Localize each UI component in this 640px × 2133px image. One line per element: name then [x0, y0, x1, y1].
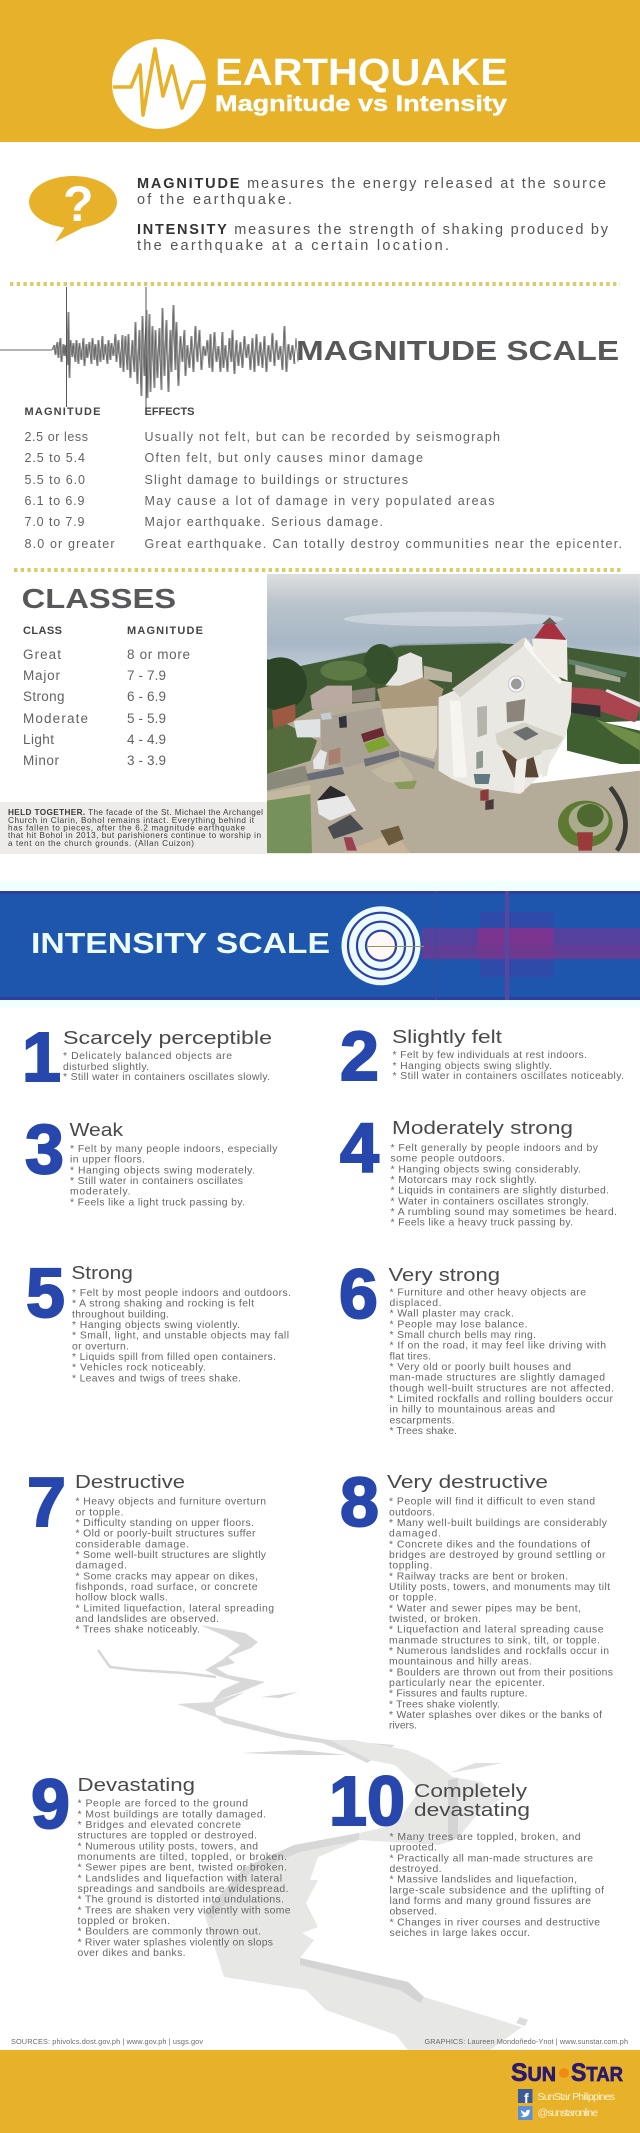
effects: considerable damage. — [76, 1539, 189, 1550]
effects: * Hanging objects swing violently. — [72, 1320, 240, 1331]
effects: * Trees are shaken very violently with some — [78, 1905, 291, 1916]
effects — [72, 1288, 291, 1384]
effects: * Practically all man-made structures are — [390, 1853, 593, 1864]
effects: * A strong shaking and rocking is felt — [72, 1299, 254, 1310]
effects: * Concrete dikes and the foundations of — [389, 1539, 590, 1550]
effects: flat tires. — [390, 1351, 431, 1362]
effects: monuments are tilted, toppled, or broken. — [78, 1852, 287, 1863]
number 5: 5 — [26, 1254, 65, 1332]
panel: definitions — [29, 176, 609, 254]
title — [414, 1781, 530, 1820]
table: classes and magnitude: Strong — [23, 689, 64, 704]
logo: SunStar — [511, 2059, 624, 2087]
item: intensity 5 — [26, 1254, 291, 1384]
panel: classes — [0, 574, 640, 854]
table: magnitude and effects — [24, 406, 622, 551]
effects: structures are toppled or destroyed. — [78, 1831, 257, 1842]
title: Devastating — [78, 1775, 195, 1795]
effects: * River water splashes violently on slops — [78, 1937, 273, 1948]
effects: or topple. — [389, 1593, 437, 1604]
effects: Utility posts, towers, and monuments may tilt — [389, 1582, 610, 1593]
effects: particularly near the epicenter. — [389, 1678, 545, 1689]
title: Scarcely perceptible — [63, 1028, 272, 1048]
table: magnitude and effects: 8.0 or greater — [24, 537, 114, 551]
table: magnitude and effects: Great earthquake. Can totally destroy communities near the epicenter. — [144, 537, 622, 551]
effects: * Liquefaction and lateral spreading cause — [389, 1625, 604, 1636]
caption: that hit Bohol in 2013, but parishioners continue to worship in — [8, 831, 261, 840]
title: Destructive — [75, 1472, 185, 1492]
effects: fishponds, road surface, or concrete — [76, 1582, 258, 1593]
effects: * Small, light, and unstable objects may fall — [72, 1331, 289, 1342]
effects: manmade structures to sink, tilt, or topple. — [389, 1635, 600, 1646]
effects: * Liquids spill from filled open containers. — [72, 1352, 276, 1363]
effects: * Boulders are thrown out from their positions — [389, 1667, 613, 1678]
effects: * Changes in river courses and destructive — [390, 1917, 600, 1928]
effects: * Difficulty standing on upper floors. — [76, 1518, 254, 1529]
logo: SunStar: SUN — [511, 2059, 556, 2087]
effects: displaced. — [390, 1298, 442, 1309]
effects: * Water in containers oscillates strongly. — [390, 1196, 589, 1207]
effects: * Trees shake violently. — [389, 1699, 500, 1710]
effects: over dikes and banks. — [78, 1948, 186, 1959]
effects: disturbed slightly. — [63, 1062, 149, 1073]
caption: HELD TOGETHER. The facade of the St. Michael the Archangel — [8, 808, 263, 817]
heading: classes: CLASSES — [22, 583, 176, 614]
title: Very destructive — [387, 1472, 548, 1492]
number 8: 8 — [340, 1463, 379, 1541]
title: Strong — [71, 1263, 133, 1283]
effects: * Still water in containers oscillates — [70, 1176, 243, 1187]
effects: hollow block walls. — [76, 1593, 168, 1604]
caption: has fallen to pieces, after the 6.2 magnitude earthquake — [8, 824, 245, 832]
effects — [390, 1832, 604, 1939]
table: classes and magnitude — [23, 625, 203, 768]
effects: * People will find it difficult to even stand — [389, 1497, 595, 1508]
panel: intensity scale banner — [0, 881, 640, 1007]
effects: destroyed. — [390, 1864, 442, 1875]
effects: twisted, or broken. — [389, 1614, 481, 1625]
item: intensity 8 — [340, 1463, 613, 1732]
effects: damaged. — [76, 1561, 127, 1572]
item: intensity 1 — [22, 1018, 272, 1096]
title: devastating — [414, 1800, 530, 1820]
effects: * Felt by most people indoors and outdoors. — [72, 1288, 291, 1299]
panel: footer — [0, 2050, 640, 2133]
item: intensity 9 — [31, 1765, 291, 1959]
photo: damaged church aerial — [254, 574, 640, 853]
chart: banner seismic wave — [422, 891, 640, 1000]
effects: or overturn. — [72, 1341, 129, 1352]
effects: * Bridges and elevated concrete — [78, 1820, 241, 1831]
effects: * Delicately balanced objects are — [63, 1051, 232, 1062]
item: intensity 10 — [329, 1762, 604, 1939]
text: intensity definition — [137, 222, 609, 254]
title: Very strong — [388, 1265, 500, 1285]
effects: bridges are destroyed by ground settling or — [389, 1550, 606, 1561]
effects: * Limited liquefaction, lateral spreading — [76, 1603, 274, 1614]
effects: uprooted. — [390, 1843, 437, 1854]
text: magnitude definition: MAGNITUDE measures the energy released at the source — [137, 176, 606, 192]
effects: * Numerous utility posts, towers, and — [78, 1841, 258, 1852]
effects: * Felt generally by people indoors and by — [390, 1143, 599, 1154]
effects: seiches in large lakes occur. — [390, 1928, 530, 1939]
effects: * Boulders are commonly thrown out. — [78, 1927, 261, 1938]
effects: * Sewer pipes are bent, twisted or broken. — [78, 1863, 287, 1874]
table: magnitude and effects: 5.5 to 6.0 — [24, 473, 85, 487]
table: classes and magnitude: 7 - 7.9 — [127, 668, 166, 683]
effects: * The ground is distorted into undulations. — [78, 1895, 284, 1906]
effects: * Trees shake noticeably. — [76, 1625, 200, 1636]
effects: throughout building. — [72, 1309, 169, 1320]
table: magnitude and effects: Major earthquake. Serious damage. — [144, 515, 383, 529]
icon: facebook — [518, 2089, 532, 2106]
effects: * Leaves and twigs of trees shake. — [72, 1373, 241, 1384]
effects: * A rumbling sound may sometimes be heard. — [390, 1207, 617, 1218]
icon: concentric circles — [342, 906, 424, 985]
number 1: 1 — [22, 1018, 61, 1096]
effects: though well-built structures are not affected. — [390, 1383, 614, 1394]
effects: toppled or broken. — [78, 1916, 170, 1927]
number 6: 6 — [339, 1255, 378, 1333]
icon: question bubble: ? — [63, 176, 94, 232]
icon: seismic pulse in circle — [112, 39, 206, 129]
effects: * Most buildings are totally damaged. — [78, 1809, 266, 1820]
illustration: ground crack — [98, 1625, 528, 2050]
number 10: 10 — [329, 1762, 405, 1840]
effects: spreadings and sandboils are widespread. — [78, 1884, 288, 1895]
item: intensity 6 — [339, 1255, 614, 1437]
effects — [78, 1799, 291, 1959]
title: Weak — [70, 1120, 124, 1140]
effects: * Some well-built structures are slightly — [76, 1550, 267, 1561]
number 2: 2 — [340, 1017, 379, 1095]
text: graphics credit: GRAPHICS: Laureen Mondoñedo-Ynot | www.sunstar.com.ph — [424, 2037, 628, 2046]
effects: * Still water in containers oscillates noticeably. — [392, 1071, 624, 1082]
title: Completely — [414, 1781, 527, 1801]
effects: * Many well-built buildings are considerably — [389, 1518, 608, 1529]
effects — [389, 1497, 613, 1732]
effects: * Some cracks may appear on dikes, — [76, 1571, 258, 1582]
effects: * Vehicles rock noticeably. — [72, 1363, 206, 1374]
effects: moderately. — [70, 1187, 130, 1198]
effects: * Water and sewer pipes may be bent, — [389, 1603, 581, 1614]
effects: * Old or poorly-built structures suffer — [76, 1529, 256, 1540]
effects: * Hanging objects swing considerably. — [390, 1164, 581, 1175]
caption: Church in Clarin, Bohol remains intact. Everything behind it — [8, 816, 255, 825]
chart: seismograph wave — [0, 287, 298, 408]
effects: escarpments. — [390, 1415, 454, 1426]
effects: * Water splashes over dikes or the banks of — [389, 1710, 602, 1721]
table: classes and magnitude: Minor — [23, 753, 60, 768]
effects: * Very old or poorly built houses and — [390, 1362, 571, 1373]
table: magnitude and effects: Usually not felt, but can be recorded by seismograph — [144, 430, 500, 444]
text: facebook name: SunStar Philippines — [538, 2091, 615, 2103]
effects: * Limited rockfalls and rolling boulders occur — [390, 1394, 614, 1405]
panel: header — [0, 0, 640, 142]
effects: * Small church bells may ring. — [390, 1330, 536, 1341]
table: magnitude and effects: Slight damage to buildings or structures — [144, 473, 408, 487]
panel: magnitude scale — [0, 287, 622, 551]
effects: * Wall plaster may crack. — [390, 1309, 514, 1320]
text: magnitude definition — [137, 176, 606, 208]
effects: * Feels like a light truck passing by. — [70, 1197, 245, 1208]
item: intensity 7 — [27, 1463, 274, 1636]
text: sources: SOURCES: phivolcs.dost.gov.ph | www.gov.ph | usgs.gov — [11, 2037, 203, 2046]
icon: facebook: f — [524, 2090, 529, 2106]
effects: * Railway tracks are bent or broken. — [389, 1571, 568, 1582]
caption — [0, 802, 267, 854]
title: Slightly felt — [392, 1027, 502, 1047]
text: twitter handle: @sunstaronline — [538, 2107, 598, 2119]
effects: outdoors. — [389, 1507, 435, 1518]
table: classes and magnitude: Moderate — [23, 711, 88, 726]
table: classes and magnitude: CLASS — [23, 625, 62, 637]
item: intensity 3 — [25, 1110, 278, 1208]
number 3: 3 — [25, 1110, 64, 1188]
table: classes and magnitude: 5 - 5.9 — [127, 711, 166, 726]
effects: * Fissures and faults rupture. — [389, 1689, 528, 1700]
effects: * Still water in containers oscillates slowly. — [63, 1072, 270, 1083]
table: classes and magnitude: 3 - 3.9 — [127, 753, 166, 768]
effects: * Furniture and other heavy objects are — [390, 1287, 586, 1298]
number 9: 9 — [31, 1765, 70, 1843]
effects: * Landslides and liquefaction with lateral — [78, 1873, 282, 1884]
table: classes and magnitude: Major — [23, 668, 60, 683]
title: Moderately strong — [392, 1118, 573, 1138]
effects: in upper floors. — [70, 1155, 145, 1166]
effects: * People are forced to the ground — [78, 1799, 248, 1810]
effects: observed. — [390, 1907, 437, 1918]
heading: magnitude scale: MAGNITUDE SCALE — [296, 335, 619, 366]
effects: * Motorcars may rock slightly. — [390, 1175, 537, 1186]
table: classes and magnitude: Light — [23, 732, 54, 747]
effects: * Heavy objects and furniture overturn — [76, 1497, 266, 1508]
table: magnitude and effects: MAGNITUDE — [24, 406, 100, 418]
effects: rivers. — [389, 1721, 417, 1732]
heading: intensity scale: INTENSITY SCALE — [31, 928, 330, 960]
effects: toppling. — [389, 1561, 432, 1572]
table: magnitude and effects: EFFECTS — [144, 406, 194, 418]
logo: SunStar: STAR — [571, 2059, 624, 2087]
table: magnitude and effects: 7.0 to 7.9 — [24, 515, 85, 529]
table: magnitude and effects: 2.5 to 5.4 — [24, 451, 85, 465]
table: classes and magnitude: Great — [23, 647, 61, 662]
table: magnitude and effects: 6.1 to 6.9 — [24, 494, 85, 508]
effects — [390, 1143, 617, 1229]
effects — [70, 1144, 278, 1208]
text: magnitude definition: of the earthquake. — [137, 192, 292, 208]
text: intensity definition: INTENSITY measures the strength of shaking produced by — [137, 222, 609, 238]
effects — [392, 1050, 624, 1082]
item: intensity 4 — [340, 1109, 617, 1229]
effects — [76, 1497, 274, 1636]
effects: land forms and many ground fissures are — [390, 1896, 591, 1907]
icon: question bubble — [29, 176, 117, 242]
effects: * If on the road, it may feel like driving with — [390, 1341, 606, 1352]
effects: or topple. — [76, 1507, 124, 1518]
effects: * Numerous landslides and rockfalls occur in — [389, 1646, 609, 1657]
effects: large-scale subsidence and the uplifting of — [390, 1885, 604, 1896]
subtitle: Magnitude vs Intensity — [215, 91, 508, 116]
table: magnitude and effects: May cause a lot of damage in very populated areas — [144, 494, 494, 508]
title: EARTHQUAKE — [215, 52, 508, 94]
effects: * Many trees are toppled, broken, and — [390, 1832, 581, 1843]
text: intensity definition: the earthquake at a certain location. — [137, 238, 449, 254]
effects: * Felt by few individuals at rest indoors. — [392, 1050, 587, 1061]
table: classes and magnitude: 6 - 6.9 — [127, 689, 166, 704]
effects: * Felt by many people indoors, especially — [70, 1144, 278, 1155]
table: classes and magnitude: MAGNITUDE — [127, 625, 203, 637]
table: magnitude and effects: Often felt, but only causes minor damage — [144, 451, 423, 465]
effects: damaged. — [389, 1529, 441, 1540]
effects — [390, 1287, 614, 1437]
effects: * Trees shake. — [390, 1426, 457, 1437]
effects: * Liquids in containers are slightly disturbed. — [390, 1186, 609, 1197]
effects: and landslides are observed. — [76, 1614, 219, 1625]
effects: some people outdoors. — [390, 1154, 505, 1165]
table: magnitude and effects: 2.5 or less — [24, 430, 88, 444]
effects: mountainous and hilly areas. — [389, 1657, 532, 1668]
effects: in hilly to mountainous areas and — [390, 1405, 555, 1416]
effects — [63, 1051, 270, 1083]
number 4: 4 — [340, 1109, 379, 1187]
icon: twitter — [518, 2106, 532, 2120]
caption: a tent on the church grounds. (Allan Cuizon) — [8, 839, 194, 848]
table: classes and magnitude: 8 or more — [127, 647, 190, 662]
effects: * Hanging objects swing slightly. — [392, 1061, 552, 1072]
item: intensity 2 — [340, 1017, 624, 1095]
effects: * People may lose balance. — [390, 1319, 528, 1330]
table: classes and magnitude: 4 - 4.9 — [127, 732, 166, 747]
number 7: 7 — [27, 1463, 66, 1541]
effects: * Feels like a heavy truck passing by. — [390, 1218, 573, 1229]
effects: * Massive landslides and liquefaction, — [390, 1875, 577, 1886]
effects: * Hanging objects swing moderately. — [70, 1165, 255, 1176]
effects: man-made structures are slightly damaged — [390, 1373, 605, 1384]
